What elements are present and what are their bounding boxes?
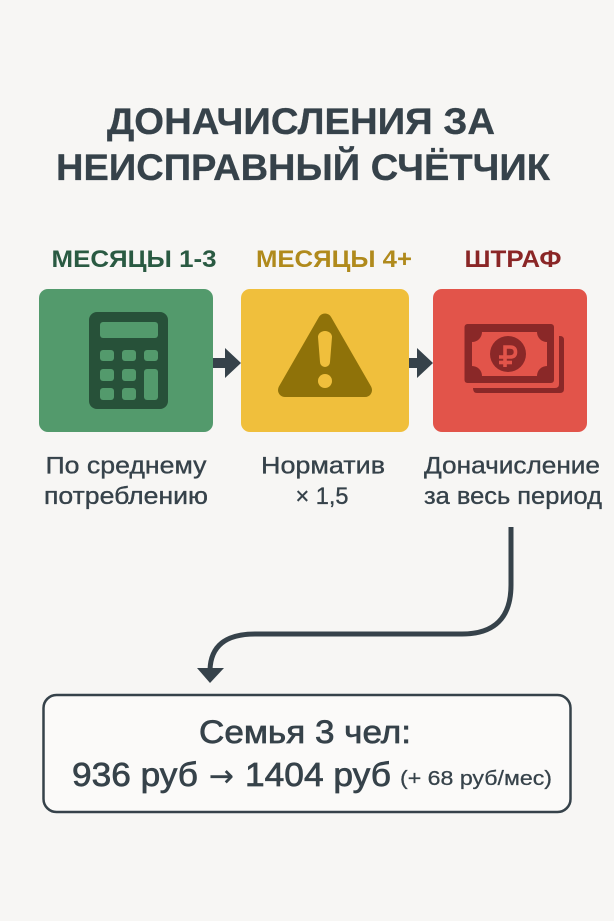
panel: red card with money xyxy=(433,289,587,432)
caption: months 1-3: потреблению xyxy=(44,483,208,510)
caption: months 1-3: По среднему xyxy=(46,452,206,480)
arrow: yellow to red xyxy=(409,348,433,378)
title: НЕИСПРАВНЫЙ СЧЁТЧИК xyxy=(56,146,550,188)
caption: penalty xyxy=(424,452,602,510)
result heading: Семья 3 чел: xyxy=(199,714,411,750)
icon: ruble banknotes xyxy=(464,324,564,393)
caption: months 1-3 xyxy=(44,452,208,510)
result values: → xyxy=(209,759,234,794)
heading: penalty: ШТРАФ xyxy=(464,246,562,273)
title: ДОНАЧИСЛЕНИЯ ЗА xyxy=(107,100,495,142)
panel: result callout xyxy=(44,695,570,812)
caption: months 4+: × 1,5 xyxy=(296,483,348,510)
icon: warning triangle xyxy=(285,320,365,390)
heading: months 1-3: МЕСЯЦЫ 1-3 xyxy=(52,246,216,273)
result values: 1404 руб xyxy=(245,756,391,793)
caption: months 4+ xyxy=(261,452,385,510)
icon: calculator xyxy=(89,312,168,409)
arrow: green to yellow xyxy=(213,348,241,378)
panel: yellow card with warning xyxy=(241,289,409,432)
caption: penalty: за весь период xyxy=(424,483,602,510)
result note: (+ 68 руб/мес) xyxy=(400,767,552,790)
caption: months 4+: Норматив xyxy=(261,452,385,480)
caption: penalty: Доначисление xyxy=(424,452,600,480)
heading: months 4+: МЕСЯЦЫ 4+ xyxy=(256,246,412,273)
result values: 936 руб xyxy=(72,756,198,793)
title xyxy=(56,100,550,188)
arrow: curved connector to result xyxy=(197,527,511,683)
panel: green card with calculator xyxy=(39,289,213,432)
result values xyxy=(72,756,391,794)
